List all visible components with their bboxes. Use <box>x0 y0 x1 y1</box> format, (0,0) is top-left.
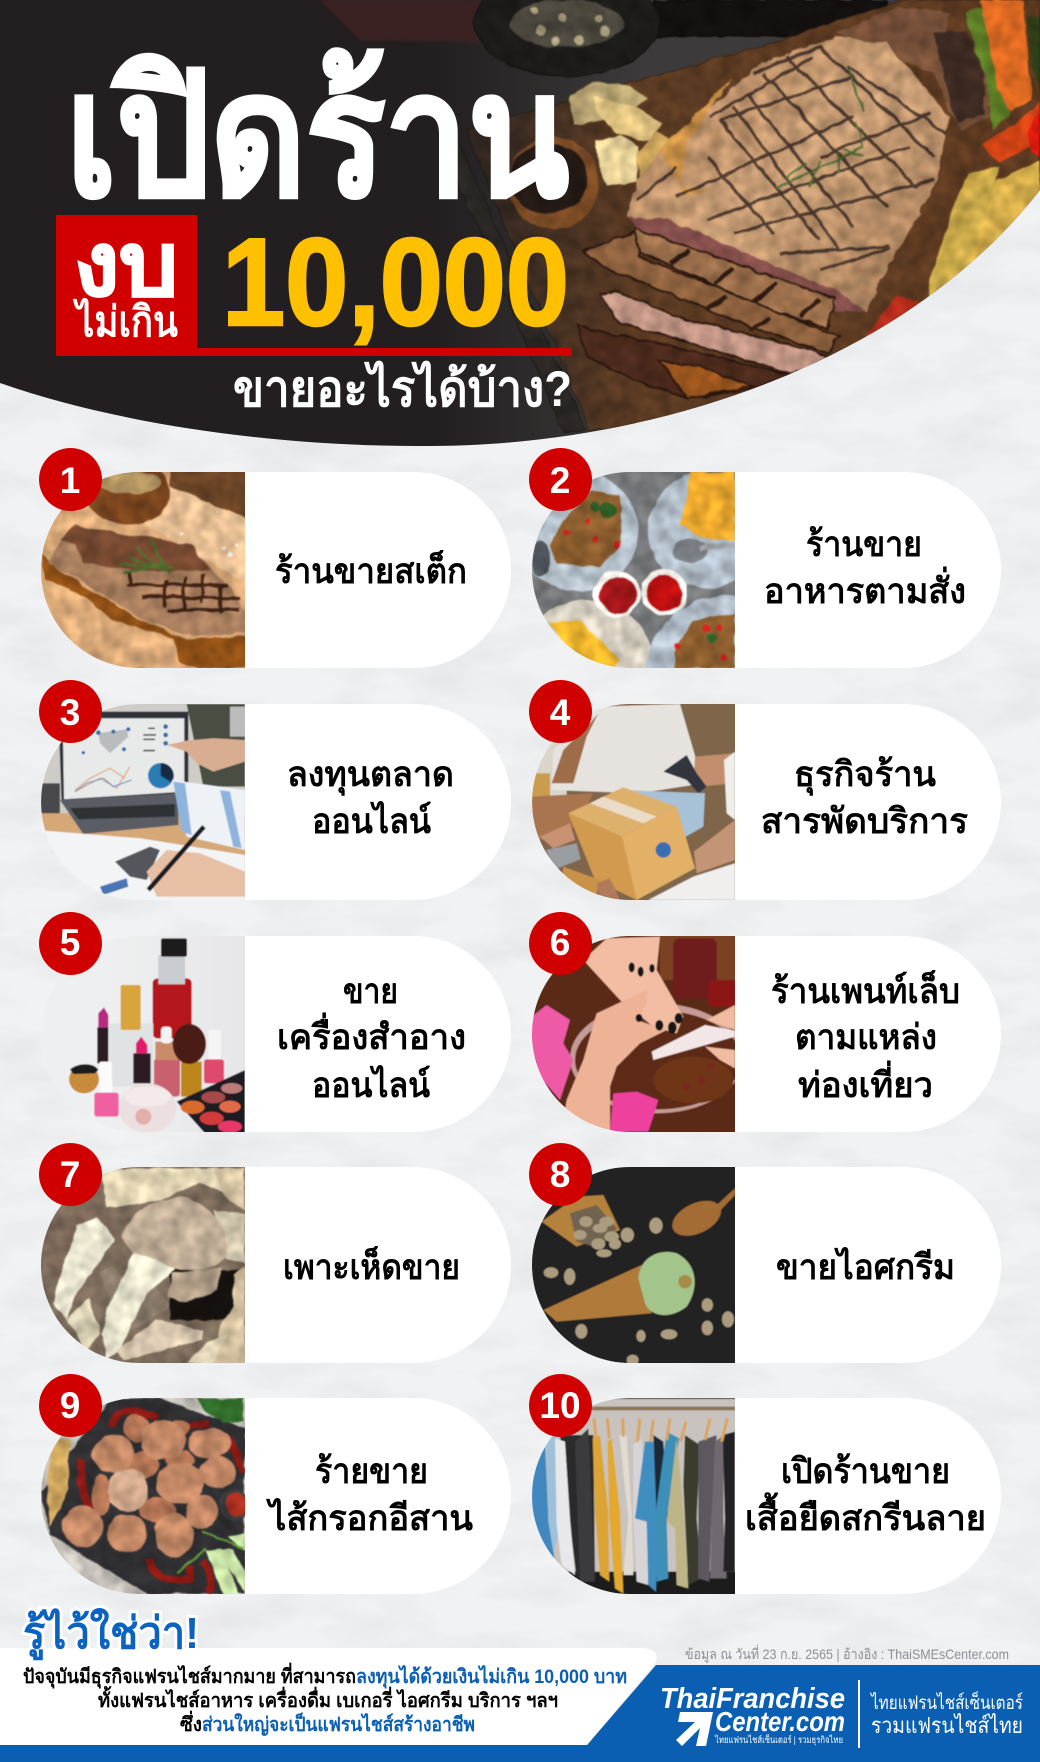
photo: steak on board <box>41 472 245 668</box>
label: เปิดร้านขาย <box>781 1452 950 1491</box>
red budget box: ไม่เกิน <box>73 297 178 345</box>
logo: ThaiFranchise Center: Center.com <box>715 1706 845 1737</box>
panel: item 7 mushroom farming <box>37 1165 511 1365</box>
footer text: ส่วนใหญ่จะเป็นแฟรนไชส์สร้างอาชีพ <box>202 1712 475 1736</box>
logo divider <box>858 1680 860 1748</box>
badge 6: 6 <box>550 922 570 963</box>
badge 6 <box>529 912 592 975</box>
photo: manicure <box>527 933 743 1133</box>
logo tagline <box>869 1690 1023 1738</box>
label <box>287 755 454 841</box>
badge 2: 2 <box>550 460 570 501</box>
icon: arrow <box>676 1712 713 1746</box>
title: เปิดร้าน <box>66 40 569 232</box>
label: ลงทุนตลาด <box>287 755 454 796</box>
badge 5: 5 <box>60 922 80 963</box>
photo: plates of food <box>532 472 735 668</box>
badge 1 <box>39 448 102 511</box>
panel: item 1 steak shop <box>37 462 511 670</box>
footer heading: รู้ไว้ใช่ว่า! <box>23 1607 199 1660</box>
label: เสื้อยืดสกรีนลาย <box>745 1492 986 1538</box>
photo: t-shirts on rack <box>527 1395 740 1595</box>
photo: mushrooms <box>37 1165 250 1365</box>
label <box>764 525 966 611</box>
panel: item 8 ice cream <box>527 1165 1001 1365</box>
label: ขายไอศกรีม <box>776 1246 955 1287</box>
label: ธุรกิจร้าน <box>794 755 936 796</box>
panel: item 9 Isan sausage <box>37 1395 511 1597</box>
label: ท่องเที่ยว <box>798 1060 933 1105</box>
label <box>265 1452 473 1538</box>
photo: laptop with charts <box>37 702 250 902</box>
label: เครื่องสำอาง <box>277 1012 466 1057</box>
panel: item 10 screen-printed t-shirts <box>527 1395 1001 1595</box>
garlic and onion <box>507 82 670 229</box>
red budget box: งบ <box>74 215 178 314</box>
number badges <box>39 448 592 1437</box>
amount: 10,000 <box>222 214 569 352</box>
grill marks <box>637 47 947 270</box>
rosemary <box>777 67 863 188</box>
badge 10 <box>529 1374 592 1437</box>
badge 8 <box>529 1143 592 1206</box>
label <box>771 969 960 1105</box>
sliced steak <box>578 228 840 398</box>
label: ร้านขายสเต็ก <box>275 549 467 591</box>
badge 9: 9 <box>60 1385 80 1426</box>
logo tagline: รวมแฟรนไชส์ไทย <box>871 1713 1023 1738</box>
photo: parcel box and scanner <box>527 702 740 902</box>
label: ตามแหล่ง <box>795 1018 937 1057</box>
label <box>277 972 466 1105</box>
footer text: ทั้งแฟรนไชส์อาหาร เครื่องดื่ม เบเกอรี่ ไอศกรีม บริการ ฯลฯ <box>98 1685 558 1712</box>
footer text <box>23 1662 627 1736</box>
label: ร้านเพนท์เล็บ <box>771 969 960 1011</box>
logo: ThaiFranchise Center: ThaiFranchise <box>660 1683 845 1715</box>
photo: Isan sausage balls <box>37 1395 251 1597</box>
badge 2 <box>529 448 592 511</box>
label: ขาย <box>343 972 398 1011</box>
logo: ThaiFranchise Center: ไทยแฟรนไชส์เซ็นเตอร์ | รวมธุรกิจไทย <box>714 1733 843 1746</box>
photo: grilled steak on wooden board <box>440 0 1040 433</box>
badge 7 <box>39 1143 102 1206</box>
badge 9 <box>39 1374 102 1437</box>
badge 8: 8 <box>550 1154 570 1195</box>
footer text: ปัจจุบันมีธุรกิจแฟรนไชส์มากมาย ที่สามารถ <box>23 1662 356 1689</box>
label <box>761 755 968 841</box>
panel: item 6 nail salon <box>527 933 1001 1133</box>
subtitle: ขายอะไรได้บ้าง? <box>233 360 572 417</box>
footer text: ซึ่ง <box>180 1710 202 1736</box>
badge 5 <box>39 912 102 975</box>
label <box>745 1452 986 1538</box>
badge 3 <box>39 680 102 743</box>
photo: pistachio ice cream cone <box>527 1165 740 1365</box>
badge 4: 4 <box>550 692 571 733</box>
source note: ข้อมูล ณ วันที่ 23 ก.ย. 2565 | อ้างอิง : ThaiSMEsCenter.com <box>685 1645 1009 1663</box>
pepper bowl <box>474 0 659 77</box>
photo: cosmetics <box>37 933 250 1133</box>
badge 3: 3 <box>60 692 80 733</box>
panel: item 5 online cosmetics <box>37 933 511 1133</box>
vegetables <box>857 0 1040 348</box>
label: ไส้กรอกอีสาน <box>265 1497 473 1538</box>
red budget box <box>56 215 572 356</box>
label: ร้ายขาย <box>315 1452 428 1491</box>
panel: item 2 made-to-order food <box>532 472 1001 668</box>
badge 7: 7 <box>60 1154 80 1195</box>
badge 4 <box>529 680 592 743</box>
label: เพาะเห็ดขาย <box>283 1245 460 1287</box>
label: ออนไลน์ <box>312 1064 430 1105</box>
badge 10: 10 <box>539 1385 581 1426</box>
main steak <box>627 7 990 312</box>
panel: item 4 parcel service <box>527 702 1001 902</box>
logo: ThaiFranchise Center <box>660 1683 845 1746</box>
label: สารพัดบริการ <box>761 802 968 841</box>
footer band <box>0 1648 1040 1762</box>
header banner with steak photo <box>0 0 1040 450</box>
label: ออนไลน์ <box>312 800 431 841</box>
label: อาหารตามสั่ง <box>764 566 966 611</box>
badge 1: 1 <box>60 460 80 501</box>
label: ร้านขาย <box>806 525 922 564</box>
panel: item 3 online marketing <box>37 702 511 902</box>
footer text: ลงทุนได้ด้วยเงินไม่เกิน 10,000 บาท <box>356 1665 627 1689</box>
